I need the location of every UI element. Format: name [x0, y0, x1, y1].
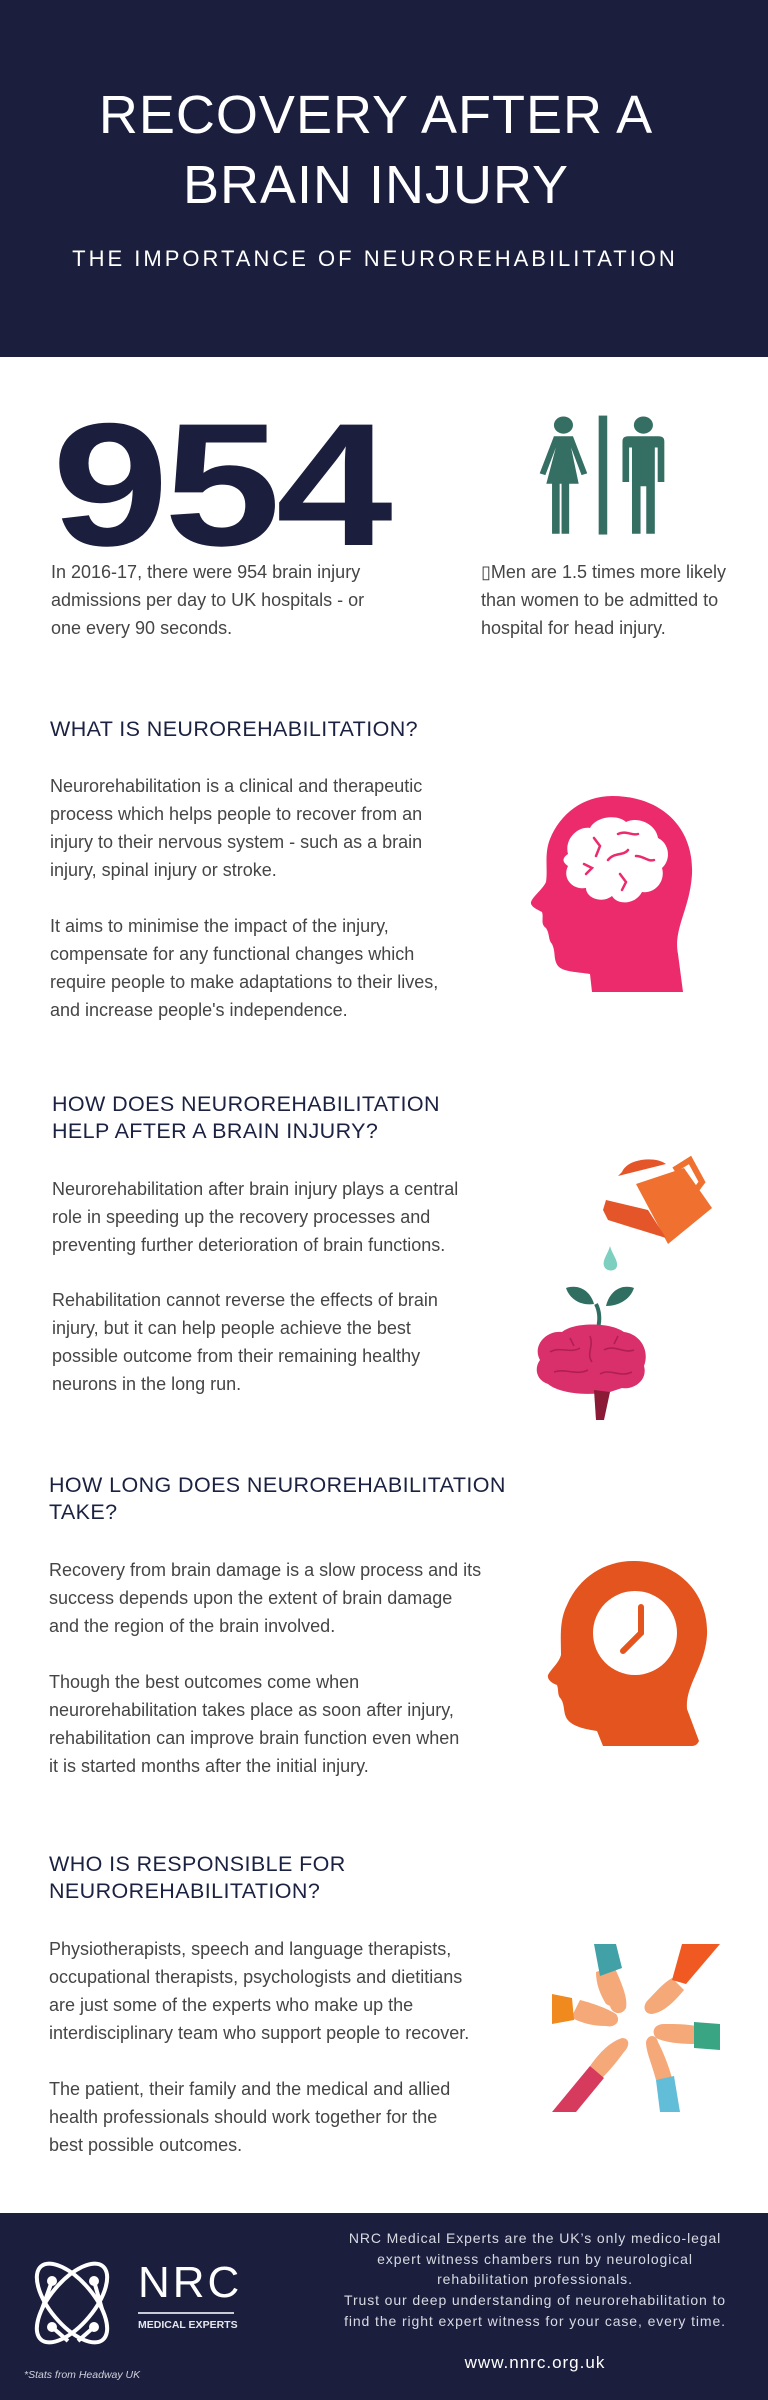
- logo: NRC medical experts: MEDICAL EXPERTS: [138, 2319, 238, 2331]
- subtitle: THE IMPORTANCE OF NEUROREHABILITATION: [72, 246, 678, 271]
- text: how does: Rehabilitation cannot reverse the effects of brain: [52, 1290, 438, 1310]
- text: how does: preventing further deterioration of brain functions.: [52, 1235, 445, 1255]
- text: how does: [52, 1179, 458, 1394]
- icon: atom logo: [34, 2262, 110, 2344]
- text: who is responsible: health professionals should work together for the: [49, 2107, 437, 2127]
- text: who is responsible: interdisciplinary team who support people to recover.: [49, 2023, 469, 2043]
- text: how does: Neurorehabilitation after brain injury plays a central: [52, 1179, 458, 1199]
- heading: how long does neurorehabilitation take: HOW LONG DOES NEUROREHABILITATION: [49, 1473, 506, 1497]
- icon: brain with sprout: [536, 1286, 646, 1420]
- stat text: men vs women: ▯Men are 1.5 times more likely: [481, 562, 726, 582]
- stat text: men vs women: hospital for head injury.: [481, 618, 666, 638]
- text: how long: Recovery from brain damage is a slow process and its: [49, 1560, 481, 1580]
- text: how long: [49, 1560, 481, 1776]
- text: how does: injury, but it can help people achieve the best: [52, 1318, 411, 1338]
- heading: who is responsible: [49, 1852, 346, 1903]
- title: [99, 85, 653, 215]
- text: who is responsible: Physiotherapists, speech and language therapists,: [49, 1939, 451, 1959]
- footer description: rehabilitation professionals.: [437, 2271, 633, 2287]
- footer description: find the right expert witness for your case, every time.: [344, 2313, 726, 2329]
- text: what is: Neurorehabilitation is a clinical and therapeutic: [50, 776, 422, 796]
- text: what is: require people to make adaptations to their lives,: [50, 972, 438, 992]
- icon: watering can with drop: [603, 1156, 712, 1270]
- text: what is: injury to their nervous system - such as a brain: [50, 832, 422, 852]
- footnote: *Stats from Headway UK: [24, 2369, 140, 2381]
- text: who is responsible: occupational therapists, psychologists and dietitians: [49, 1967, 462, 1987]
- text: who is responsible: best possible outcomes.: [49, 2135, 242, 2155]
- logo: NRC medical experts: [34, 2258, 242, 2344]
- text: how long: rehabilitation can improve brain function even when: [49, 1728, 459, 1748]
- logo text: NRC: [138, 2258, 242, 2307]
- text: how long: Though the best outcomes come when: [49, 1672, 359, 1692]
- text: how does: role in speeding up the recovery processes and: [52, 1207, 430, 1227]
- stat text: admissions: one every 90 seconds.: [51, 618, 232, 638]
- stat: 954 number: 954: [52, 388, 388, 583]
- title: BRAIN INJURY: [183, 155, 569, 215]
- text: what is: and increase people's independence.: [50, 1000, 348, 1020]
- stat text: men vs women: [481, 562, 726, 638]
- stat text: admissions: In 2016-17, there were 954 brain injury: [51, 562, 360, 582]
- text: what is: [50, 776, 438, 1020]
- stat text: admissions: [51, 562, 364, 638]
- heading: who is responsible: WHO IS RESPONSIBLE FOR: [49, 1852, 346, 1876]
- heading: how does neurorehabilitation help: HELP AFTER A BRAIN INJURY?: [52, 1119, 378, 1143]
- heading: how does neurorehabilitation help: HOW DOES NEUROREHABILITATION: [52, 1092, 440, 1116]
- title: RECOVERY AFTER A: [99, 85, 653, 145]
- heading: who is responsible: NEUROREHABILITATION?: [49, 1879, 320, 1903]
- text: what is: It aims to minimise the impact of the injury,: [50, 916, 389, 936]
- text: what is: injury, spinal injury or stroke.: [50, 860, 277, 880]
- text: what is: process which helps people to recover from an: [50, 804, 422, 824]
- stat text: admissions: admissions per day to UK hospitals - or: [51, 590, 364, 610]
- heading: how long does neurorehabilitation take: [49, 1473, 506, 1524]
- stat text: men vs women: than women to be admitted to: [481, 590, 718, 610]
- text: who is responsible: The patient, their family and the medical and allied: [49, 2079, 450, 2099]
- heading: how long does neurorehabilitation take: TAKE?: [49, 1500, 118, 1524]
- text: what is: compensate for any functional changes which: [50, 944, 414, 964]
- footer description: NRC Medical Experts are the UK’s only medico-legal: [349, 2230, 721, 2246]
- footer description: Trust our deep understanding of neurorehabilitation to: [344, 2292, 726, 2308]
- footer description: [344, 2230, 726, 2329]
- header banner: [0, 0, 768, 357]
- icon: pink head with brain: [530, 796, 692, 992]
- footer: [0, 2213, 768, 2400]
- website url: www.nnrc.org.uk: [465, 2353, 605, 2372]
- heading: what is neurorehabilitation: WHAT IS NEUROREHABILITATION?: [50, 717, 418, 741]
- text: how long: neurorehabilitation takes place as soon after injury,: [49, 1700, 454, 1720]
- text: how long: it is started months after the initial injury.: [49, 1756, 369, 1776]
- icon: orange head with clock: [548, 1561, 708, 1746]
- icon: woman and man: [540, 416, 664, 535]
- text: how long: success depends upon the extent of brain damage: [49, 1588, 452, 1608]
- footer description: expert witness chambers run by neurological: [377, 2251, 693, 2267]
- text: how does: neurons in the long run.: [52, 1374, 241, 1394]
- text: who is responsible: are just some of the experts who make up the: [49, 1995, 413, 2015]
- text: how does: possible outcome from their remaining healthy: [52, 1346, 420, 1366]
- text: how long: and the region of the brain involved.: [49, 1616, 335, 1636]
- icon: circle of hands: [552, 1944, 720, 2112]
- text: who is responsible: [49, 1939, 469, 2155]
- heading: how does neurorehabilitation help: [52, 1092, 440, 1143]
